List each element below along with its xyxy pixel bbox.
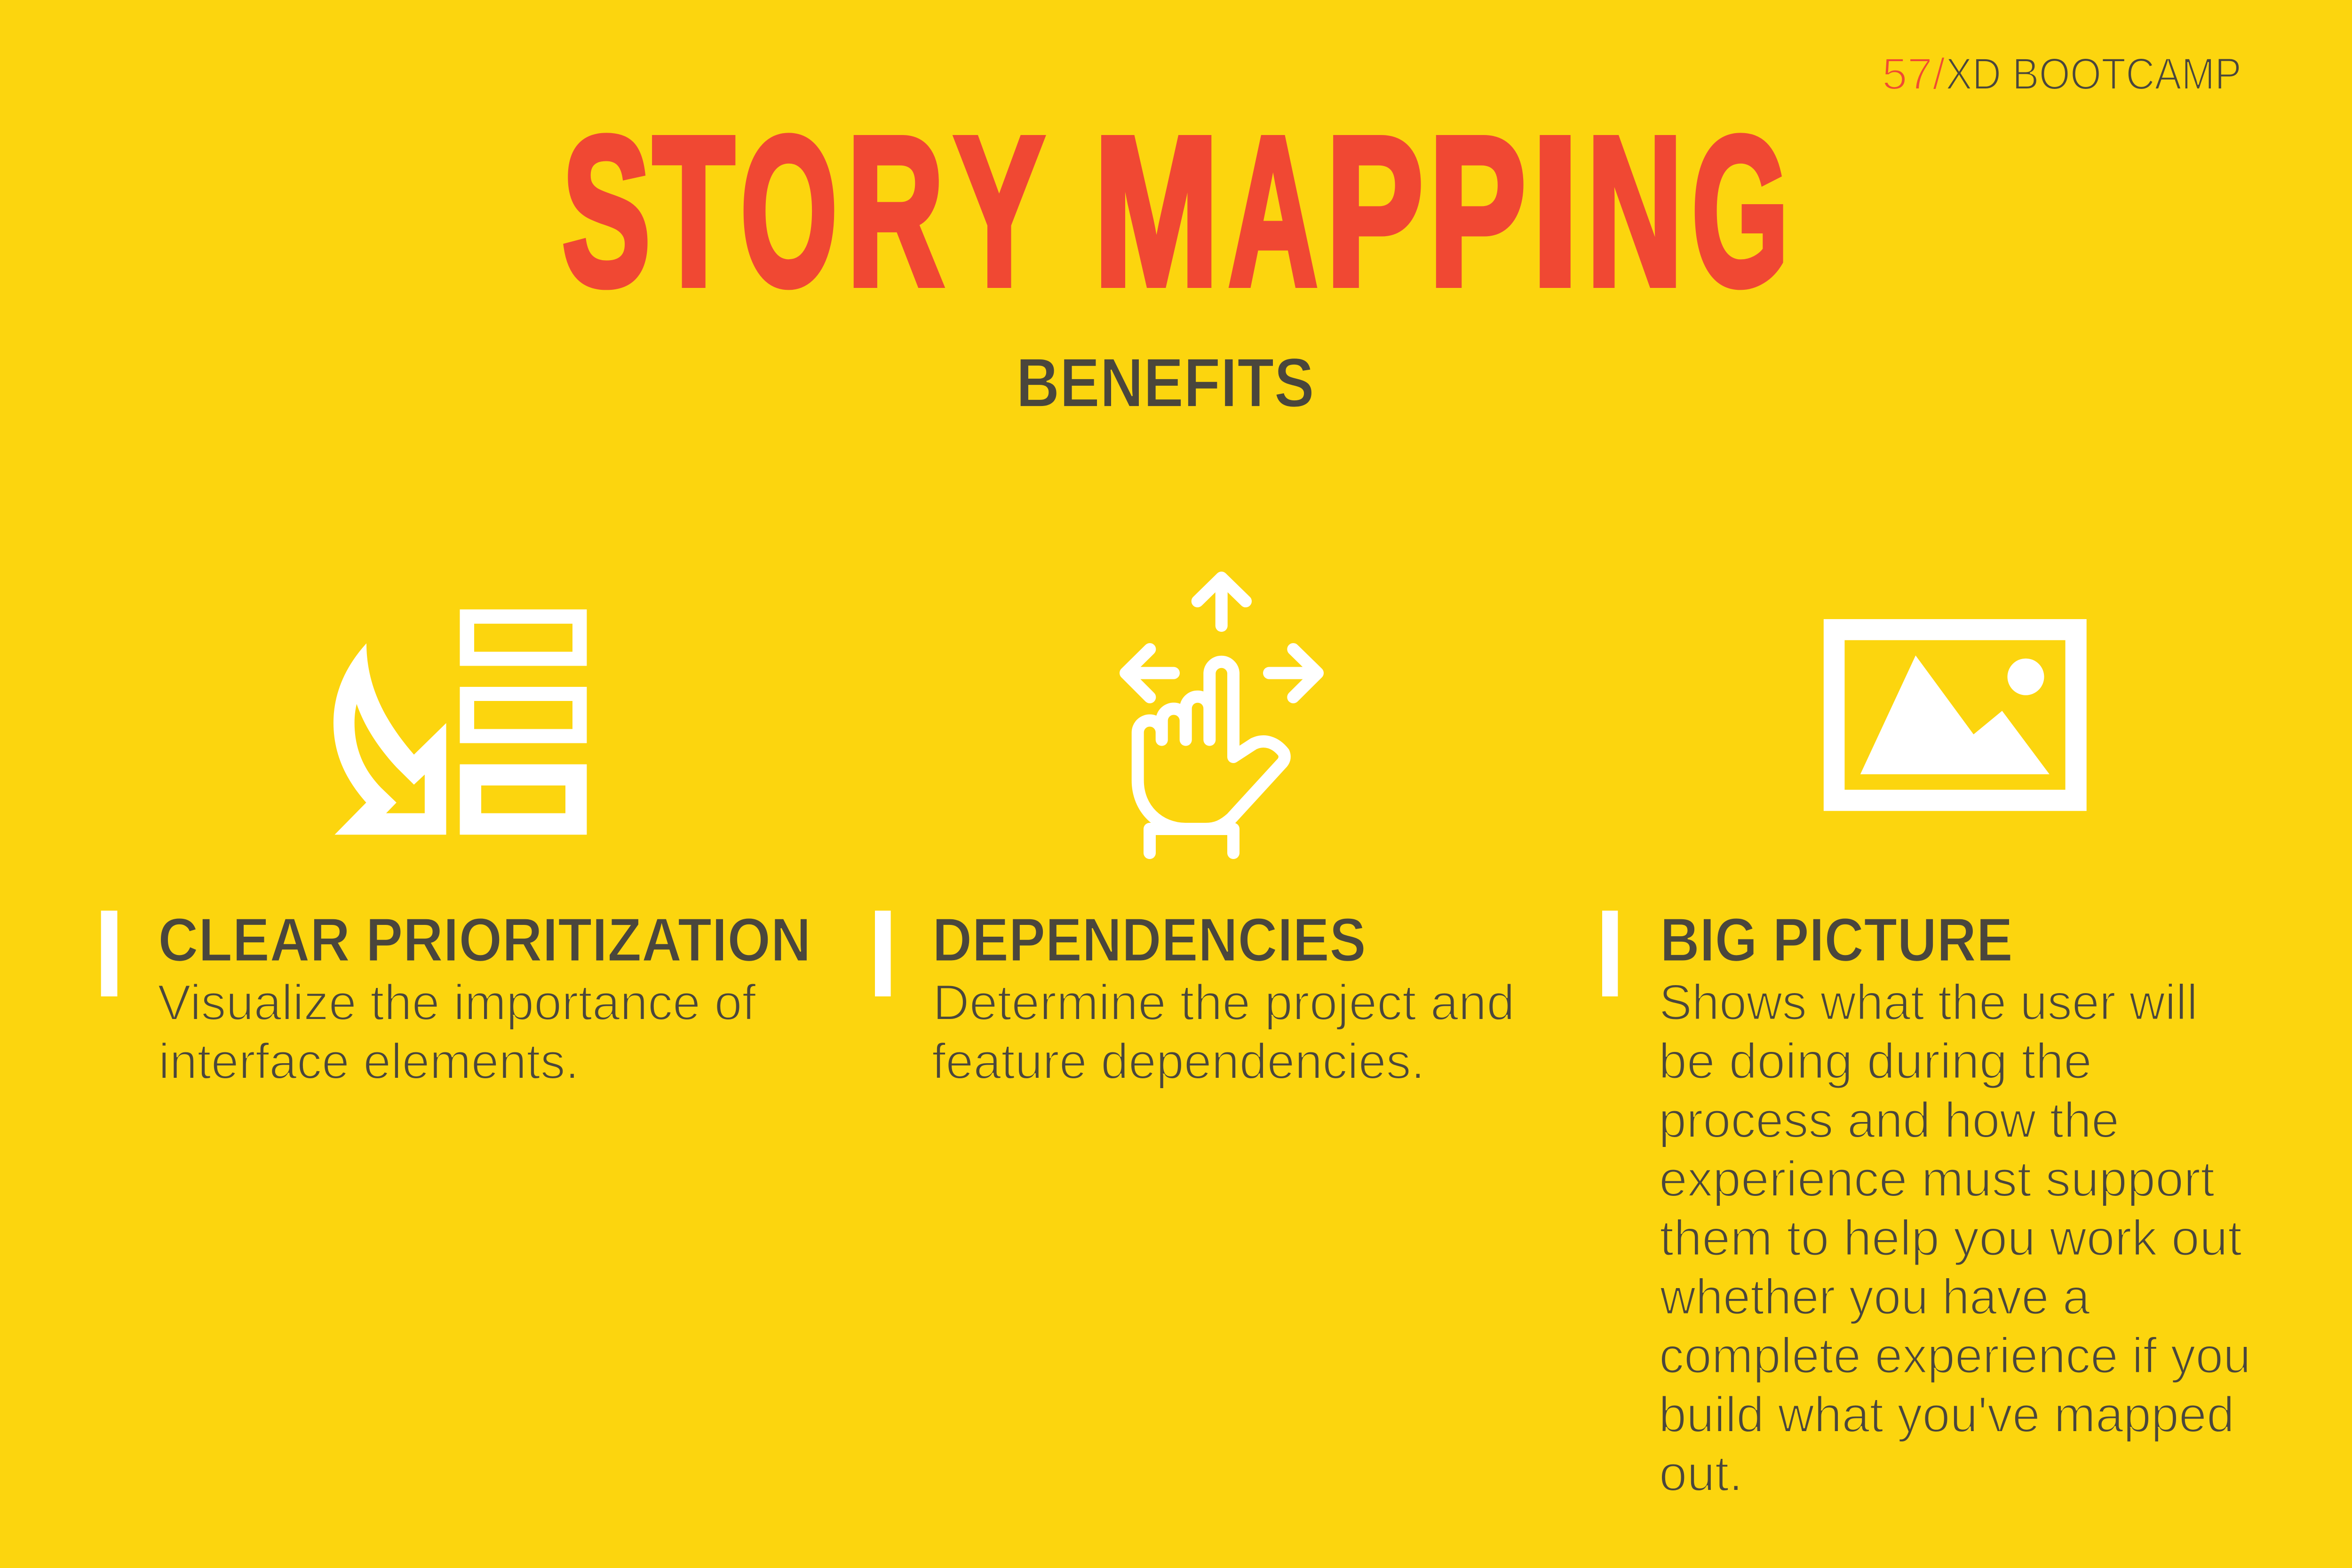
title: P bbox=[1326, 92, 1423, 330]
body text: out. bbox=[1659, 1445, 1743, 1502]
body text: complete experience if you bbox=[1659, 1327, 2251, 1384]
panel: clear prioritization bbox=[101, 905, 811, 1090]
panel: dependencies bbox=[875, 905, 1515, 1090]
wrist bbox=[1150, 829, 1233, 853]
title: A bbox=[1228, 92, 1318, 330]
body text bbox=[1659, 974, 2251, 1502]
body text: Determine the project and bbox=[933, 974, 1515, 1030]
body text: whether you have a bbox=[1660, 1268, 2090, 1325]
title: G bbox=[1692, 92, 1789, 330]
body text bbox=[158, 974, 756, 1090]
icon: arrow and list blocks bbox=[334, 609, 587, 835]
heading: DEPENDENCIES bbox=[932, 905, 1366, 974]
title: T bbox=[652, 92, 735, 330]
arrow right bbox=[1269, 649, 1318, 697]
hand bbox=[1138, 662, 1285, 829]
heading: CLEAR PRIORITIZATION bbox=[158, 905, 811, 974]
title: R bbox=[847, 92, 944, 330]
body text: Shows what the user will bbox=[1659, 974, 2198, 1030]
arrow left bbox=[1126, 649, 1174, 697]
title: P bbox=[1429, 92, 1526, 330]
accent bar bbox=[101, 911, 117, 996]
accent bar bbox=[1602, 911, 1618, 996]
title: Y bbox=[954, 92, 1043, 330]
icon: pointing hand with arrows bbox=[1126, 578, 1318, 853]
body text: build what you've mapped bbox=[1659, 1386, 2234, 1442]
body text: experience must support bbox=[1659, 1151, 2215, 1207]
body text: process and how the bbox=[1659, 1091, 2119, 1148]
title: I bbox=[1531, 92, 1580, 330]
subtitle: BENEFITS bbox=[1016, 344, 1314, 422]
title: S bbox=[562, 92, 651, 330]
body text: Visualize the importance of bbox=[158, 974, 756, 1030]
arrow up bbox=[1198, 578, 1246, 626]
title: M bbox=[1093, 92, 1219, 330]
accent bar bbox=[875, 911, 891, 996]
brand label: 57/XD BOOTCAMP: 57/ bbox=[1882, 49, 1946, 99]
body text bbox=[932, 974, 1515, 1090]
heading: BIG PICTURE bbox=[1660, 905, 2013, 974]
brand label: 57/XD BOOTCAMP: XD BOOTCAMP bbox=[1946, 49, 2241, 99]
body text: them to help you work out bbox=[1660, 1210, 2242, 1266]
panel: big picture bbox=[1602, 905, 2251, 1502]
body text: feature dependencies. bbox=[932, 1033, 1425, 1090]
title: O bbox=[740, 92, 837, 330]
title: N bbox=[1587, 92, 1683, 330]
body text: interface elements. bbox=[159, 1033, 579, 1090]
icon: picture frame bbox=[1824, 619, 2087, 811]
body text: be doing during the bbox=[1659, 1033, 2092, 1089]
